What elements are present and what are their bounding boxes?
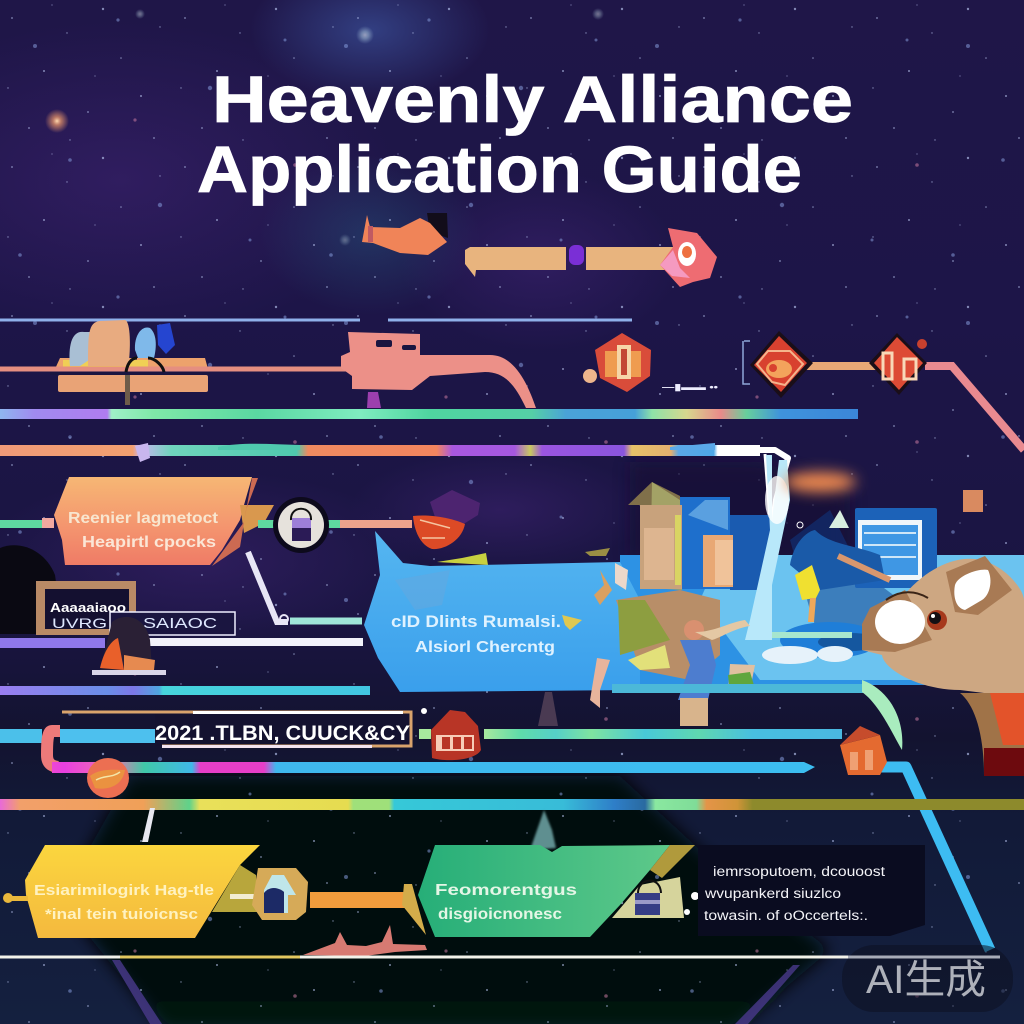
panel: green step	[418, 845, 695, 937]
figures on step 1	[70, 320, 175, 405]
label: plaque: UVRG	[52, 615, 107, 631]
panel: green step: disgioicnonesc	[438, 906, 562, 923]
route line 2 with pink pipe	[0, 366, 350, 372]
panel: green step: Feomorentgus	[435, 882, 577, 899]
icon: hex bag	[252, 868, 308, 920]
icon: orange basket	[840, 726, 887, 775]
panel: blue central step: cID Dlints Rumalsi.	[391, 612, 561, 631]
panel: outlined title bar: 2021 .TLBN, CUUCK&CY	[155, 722, 410, 745]
text box: dark note	[698, 845, 925, 936]
top arrow banner	[362, 213, 717, 287]
connector with bag node	[3, 865, 426, 935]
label: plaque: Aaaaaiaoo	[50, 600, 126, 615]
scene: stage background	[620, 510, 1024, 685]
text box: dark note: wvupankerd siuzlco	[704, 886, 841, 901]
scene: figure in blue dress	[678, 620, 756, 726]
panel: orange step	[54, 477, 274, 566]
title: Heavenly Alliance	[212, 62, 853, 136]
rainbow line 10	[0, 799, 1024, 810]
icon: orange fruit	[87, 758, 129, 798]
scene: blue cabin and tall door	[680, 497, 770, 590]
scene: brown tree stake	[538, 692, 558, 726]
panel: yellow step	[25, 845, 260, 938]
bottom line	[0, 956, 1000, 958]
route line 1	[0, 318, 632, 322]
icon: circle bag	[273, 497, 329, 553]
line 7	[0, 680, 902, 750]
title: Application Guide	[197, 132, 802, 206]
text box: dark note: towasin. of oOccertels:.	[704, 908, 868, 923]
panel: orange step: Heapirtl cpocks	[82, 534, 216, 551]
pink roots	[303, 925, 427, 956]
orange hat	[92, 617, 166, 675]
icon: red bag	[421, 708, 481, 760]
small caption: —▮▬▬ ••	[662, 382, 718, 392]
panel: blue central step	[364, 531, 640, 692]
panel: yellow step: Esiarimilogirk Hag-tle	[34, 882, 214, 899]
rainbow line 4	[0, 443, 760, 462]
watermark: AI生成	[866, 958, 986, 1002]
pink pipe machine	[341, 332, 536, 408]
icon: orange boot	[362, 213, 448, 255]
white slash	[142, 808, 155, 842]
connector line with circle node	[0, 497, 412, 553]
panel: outlined title bar	[62, 711, 411, 748]
icon: pink head arrow	[660, 228, 717, 287]
black hood	[0, 545, 60, 634]
scene: wooden house	[616, 482, 720, 680]
white elbow connector	[248, 552, 362, 623]
purple gem	[569, 245, 584, 265]
icon: olive bag block	[612, 877, 699, 918]
icon: hex badge 3	[869, 333, 927, 395]
monkey mascot	[862, 556, 1024, 776]
banner bar	[465, 247, 566, 277]
route: blue descending line	[880, 767, 990, 950]
panel: yellow step: *inal tein tuioicnsc	[45, 906, 198, 923]
scene: figure in yellow dress	[790, 510, 890, 622]
title	[197, 62, 853, 206]
label: plaque	[36, 581, 235, 635]
watermark	[842, 945, 1013, 1012]
scene: white light beam	[745, 455, 856, 640]
text box: dark note: iemrsoputoem, dcouoost	[713, 864, 885, 879]
rainbow line 3	[0, 409, 858, 419]
tree leaf	[530, 810, 556, 850]
label: plaque: SAIAOC	[143, 615, 217, 632]
white connector to stage	[740, 450, 788, 530]
route segment between badges	[800, 362, 880, 370]
icon: hex badge 1	[583, 333, 651, 392]
panel: orange step: Reenier lagmetoct	[68, 510, 219, 527]
pink elbow	[47, 731, 60, 767]
icon: red bowl	[413, 490, 488, 565]
panel: orange step 1	[50, 358, 210, 392]
icon: hex badge 2	[743, 331, 813, 398]
scene: small figure	[562, 548, 628, 708]
panel: blue central step: Alsiorl Chercntg	[415, 639, 555, 656]
line 6	[0, 638, 363, 648]
line 9 with arrow	[52, 762, 815, 773]
scene: blue screen	[855, 490, 983, 588]
line 8	[0, 729, 842, 743]
